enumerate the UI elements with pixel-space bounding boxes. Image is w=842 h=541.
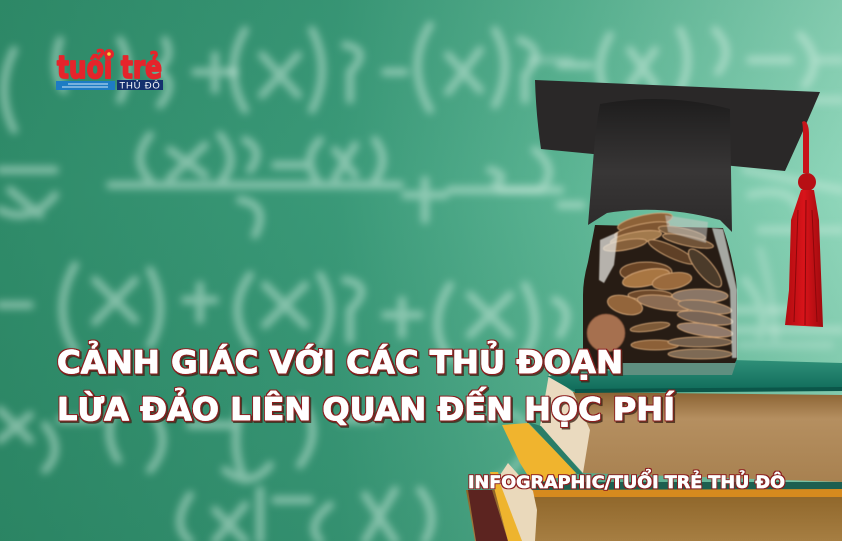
stack of books bbox=[466, 360, 842, 541]
logo wordmark: tuổi trẻ bbox=[57, 50, 162, 86]
coin jar bbox=[583, 209, 737, 375]
jar glass bbox=[583, 225, 737, 369]
logo name plate: THỦ ĐÔ bbox=[119, 80, 161, 92]
logo star bbox=[104, 49, 114, 59]
cap board bbox=[535, 80, 820, 171]
title line 1: CẢNH GIÁC VỚI CÁC THỦ ĐOẠN bbox=[57, 339, 623, 381]
coins bbox=[587, 209, 734, 359]
title line 2: LỪA ĐẢO LIÊN QUAN ĐẾN HỌC PHÍ bbox=[57, 386, 675, 428]
cap body bbox=[588, 99, 732, 232]
logo blue band bbox=[56, 81, 115, 90]
lower book bbox=[466, 463, 842, 541]
logo: Tuổi Trẻ Thủ Đô bbox=[56, 49, 163, 92]
jar base bbox=[621, 363, 736, 375]
glass highlights bbox=[599, 232, 618, 283]
title bbox=[57, 339, 675, 428]
credit: INFOGRAPHIC/TUỔI TRẺ THỦ ĐÔ bbox=[468, 468, 785, 493]
red tassel bbox=[785, 121, 823, 327]
upper book bbox=[502, 360, 842, 484]
graduation cap bbox=[535, 80, 820, 232]
